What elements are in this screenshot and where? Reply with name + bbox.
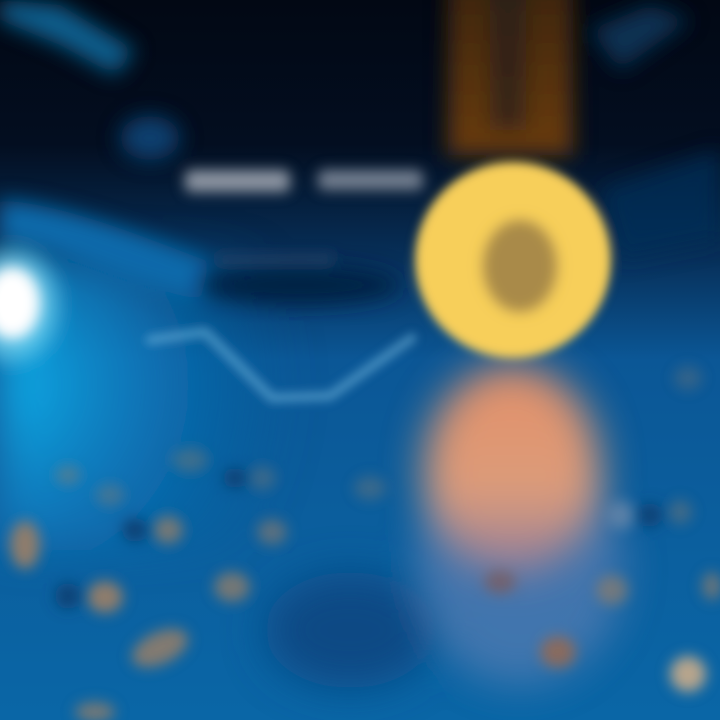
dark lower ellipse xyxy=(265,572,435,688)
dark dot accents xyxy=(55,468,662,609)
upper blue streaks xyxy=(0,0,720,300)
line chart xyxy=(150,332,412,398)
orange light beam xyxy=(448,0,573,155)
left cyan glow xyxy=(0,250,300,550)
coin body xyxy=(415,162,611,358)
pale reflection halo xyxy=(415,455,625,685)
coin symbol xyxy=(483,220,557,312)
peach coin reflection xyxy=(424,365,600,575)
scattered data dots xyxy=(10,366,720,720)
title text placeholder xyxy=(185,170,423,265)
gold coin xyxy=(415,162,611,358)
white glow on left edge xyxy=(0,249,58,361)
dark band under title xyxy=(200,265,400,305)
